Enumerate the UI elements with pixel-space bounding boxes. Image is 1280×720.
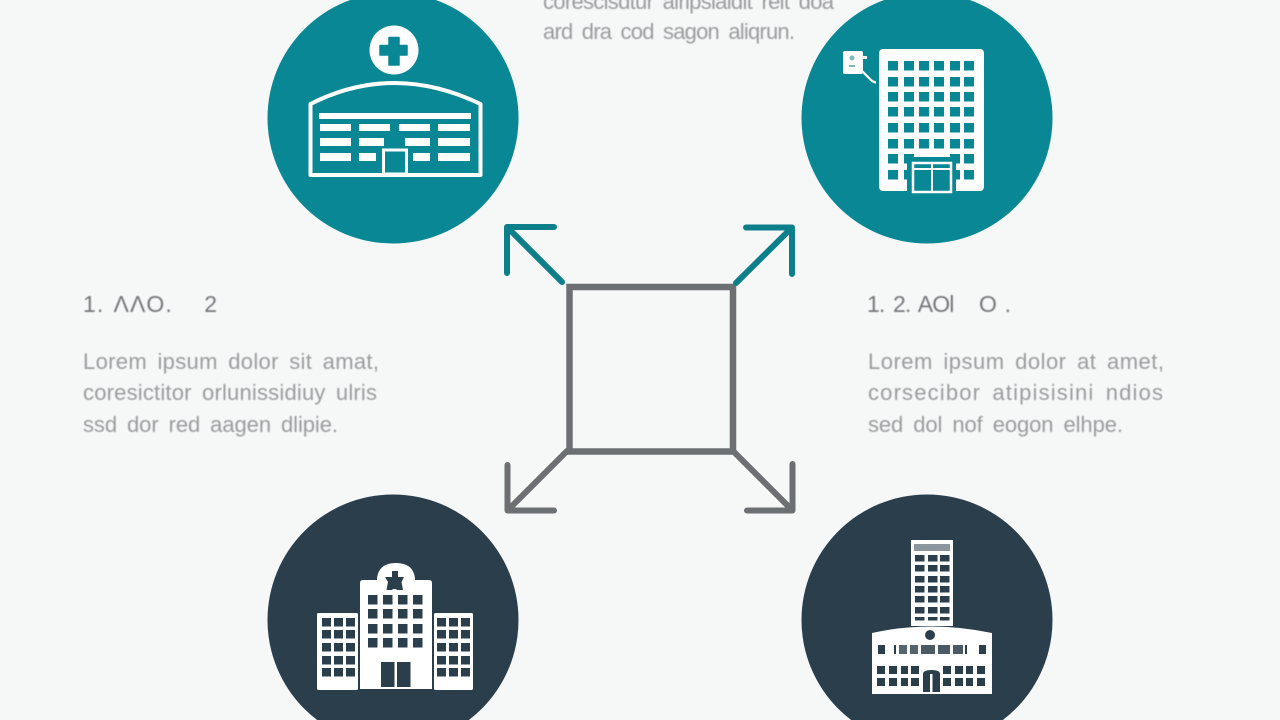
icon: cross badge xyxy=(370,26,418,74)
text block: right: Lorem ipsum dolor at amet, xyxy=(868,349,1164,374)
arrow: bottom-right xyxy=(734,452,792,510)
icon: wall plug xyxy=(843,51,876,82)
text block: left: Lorem ipsum dolor sit amat, xyxy=(83,349,379,374)
arrow: top-left xyxy=(507,227,562,282)
text block: top center xyxy=(543,0,835,44)
icon: office tower xyxy=(879,49,984,193)
text block: right xyxy=(867,291,1164,437)
text block: left: 1. ΛΛO. 2 xyxy=(83,291,217,317)
panel: top-right teal circle with tower icon xyxy=(802,0,1052,244)
text block: right: 1. 2. AOl O . xyxy=(867,291,1011,317)
text block: top center: ard dra cod sagon aliqrun. xyxy=(543,19,795,44)
icon: wide hospital building xyxy=(310,83,480,175)
icon: low base building xyxy=(872,626,992,694)
arrow: bottom-left xyxy=(508,451,567,510)
panel: bottom-left dark circle with hospital icon xyxy=(268,494,518,720)
arrow: top-right xyxy=(736,228,792,283)
text block: right: corsecibor atipisisini ndios xyxy=(868,380,1163,405)
panel: top-left teal circle with hospital icon xyxy=(268,0,518,244)
text block: right: sed dol nof eogon elhpe. xyxy=(868,412,1123,437)
icon: three-block hospital xyxy=(317,563,473,690)
text block: left xyxy=(83,291,379,437)
center square xyxy=(570,287,733,452)
text block: left: ssd dor red aagen dlipie. xyxy=(83,412,338,437)
icon: tower block xyxy=(911,540,953,626)
text block: left: coresictitor orlunissidiuy ulris xyxy=(83,380,377,405)
panel: bottom-right dark circle with tower and base icon xyxy=(802,494,1052,720)
